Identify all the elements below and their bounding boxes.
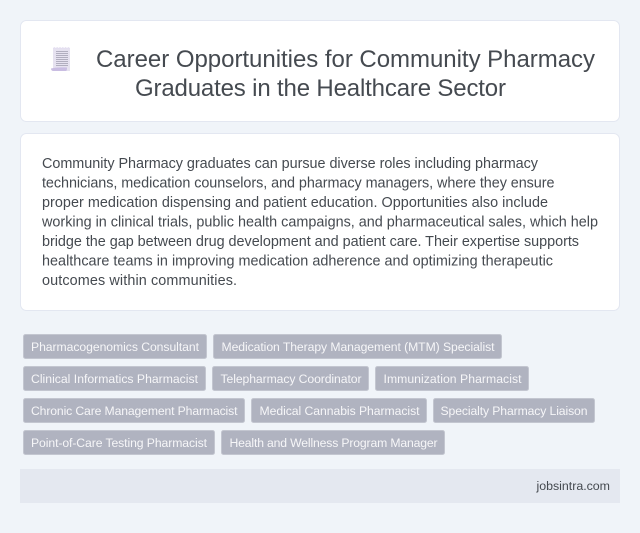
- tag: Clinical Informatics Pharmacist: [24, 366, 206, 390]
- tag: Telepharmacy Coordinator: Telepharmacy Coordinator: [220, 372, 362, 386]
- tag: Point-of-Care Testing Pharmacist: [24, 430, 214, 454]
- tag: MTM Specialist: Medication Therapy Management (MTM) Specialist: [222, 340, 495, 354]
- tag: Specialty Pharmacy Liaison: [434, 398, 594, 422]
- tag: Chronic Care Management Pharmacist: Chronic Care Management Pharmacist: [31, 404, 238, 418]
- tag: Telepharmacy Coordinator: [212, 366, 368, 390]
- description text: healthcare teams in improving medication adherence and optimizing therapeutic: [42, 254, 553, 270]
- tag: Chronic Care Management Pharmacist: [24, 398, 244, 422]
- title: Graduates in the Healthcare Sector: [135, 75, 506, 102]
- description text: technicians, medication counselors, and pharmacy managers, where they ensure: [42, 176, 554, 192]
- tag: Immunization Pharmacist: [376, 366, 528, 390]
- tag: Medical Cannabis Pharmacist: [252, 398, 426, 422]
- tag: Pharmacogenomics Consultant: [24, 334, 206, 358]
- tag: Pharmacogenomics Consultant: Pharmacogenomics Consultant: [31, 340, 200, 354]
- footer source text: jobsintra.com: [536, 479, 610, 493]
- tag: Health and Wellness Program Manager: Health and Wellness Program Manager: [230, 436, 438, 450]
- description text: proper medication dispensing and patient education. Opportunities also include: [42, 195, 548, 211]
- description text: [41, 156, 598, 289]
- tag: Immunization Pharmacist: Immunization Pharmacist: [384, 372, 522, 386]
- title: Career Opportunities for Community Pharmacy: [96, 46, 595, 73]
- header panel: [20, 20, 620, 122]
- tag: Health and Wellness Program Manager: [222, 430, 444, 454]
- title: [96, 46, 595, 102]
- footer: [20, 469, 620, 503]
- description panel: [20, 134, 620, 310]
- tag: Point-of-Care Testing Pharmacist: Point-of-Care Testing Pharmacist: [31, 436, 208, 450]
- icon: pharmacy receipt: [51, 47, 70, 71]
- tag: MTM Specialist: [214, 334, 502, 358]
- description text: bridge the gap between drug development and patient care. Their expertise supports: [42, 234, 579, 250]
- description text: outcomes within communities.: [42, 273, 237, 289]
- tag: Specialty Pharmacy Liaison: Specialty Pharmacy Liaison: [440, 404, 588, 418]
- description text: working in clinical trials, public health campaigns, and pharmaceutical sales, which help: [41, 214, 598, 230]
- role tags: [24, 334, 594, 454]
- tag: Medical Cannabis Pharmacist: Medical Cannabis Pharmacist: [260, 404, 420, 418]
- tag: Clinical Informatics Pharmacist: Clinical Informatics Pharmacist: [31, 372, 199, 386]
- description text: Community Pharmacy graduates can pursue diverse roles including pharmacy: [42, 156, 539, 172]
